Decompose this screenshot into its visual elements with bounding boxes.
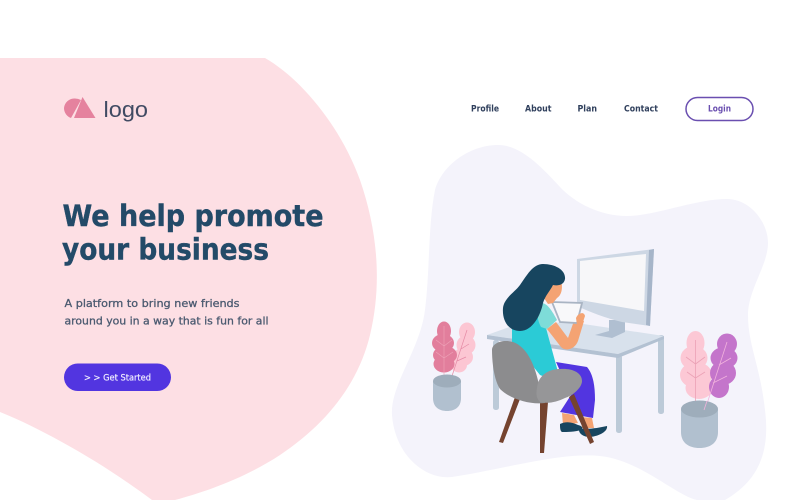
sleeve bbox=[537, 303, 557, 329]
hair bbox=[503, 264, 565, 331]
navigation bbox=[471, 104, 658, 114]
logo bbox=[64, 97, 148, 122]
arm bbox=[547, 318, 584, 349]
login button bbox=[686, 98, 753, 120]
headline bbox=[62, 199, 324, 266]
login button: Login bbox=[708, 104, 731, 114]
pot bbox=[681, 409, 718, 448]
pink leaf bbox=[680, 331, 712, 399]
nav: About: About bbox=[525, 104, 552, 114]
right plant bbox=[680, 331, 738, 448]
get started button bbox=[64, 364, 171, 391]
trousers bbox=[556, 362, 595, 418]
chair legs bbox=[499, 397, 520, 443]
logo wordmark: logo bbox=[104, 97, 148, 122]
left plant bbox=[432, 322, 476, 411]
nav: Contact: Contact bbox=[624, 104, 658, 114]
nav: Profile: Profile bbox=[471, 104, 499, 114]
far right leg bbox=[658, 335, 664, 414]
description: A platform to bring new friends bbox=[64, 297, 240, 310]
front leg bbox=[616, 355, 622, 433]
logo icon bbox=[64, 97, 96, 118]
desk and monitor bbox=[487, 249, 664, 433]
description: around you in a way that is fun for all bbox=[64, 314, 268, 328]
chair back bbox=[492, 341, 545, 403]
monitor stand bbox=[595, 320, 625, 338]
pot bbox=[433, 381, 461, 411]
light pink leaf bbox=[451, 322, 476, 372]
headline: We help promote bbox=[62, 199, 324, 233]
hand bbox=[576, 313, 585, 325]
lavender illustration blob bbox=[392, 145, 768, 500]
desk top bbox=[487, 322, 664, 354]
tablet bbox=[552, 302, 582, 323]
monitor screen bbox=[580, 254, 646, 311]
shoes bbox=[560, 422, 582, 432]
chair seat bbox=[536, 369, 582, 403]
dark pink leaf bbox=[432, 322, 457, 372]
nav: Plan: Plan bbox=[578, 104, 597, 114]
monitor body bbox=[577, 249, 654, 326]
description bbox=[64, 297, 268, 328]
back leg bbox=[493, 340, 499, 410]
face and neck bbox=[544, 280, 562, 304]
pink background blob bbox=[0, 58, 377, 500]
woman on chair bbox=[492, 264, 607, 453]
headline: your business bbox=[62, 232, 269, 266]
purple leaf bbox=[709, 334, 738, 398]
ankles bbox=[562, 413, 594, 428]
get started button: > > Get Started bbox=[84, 374, 151, 384]
torso bbox=[512, 303, 558, 376]
